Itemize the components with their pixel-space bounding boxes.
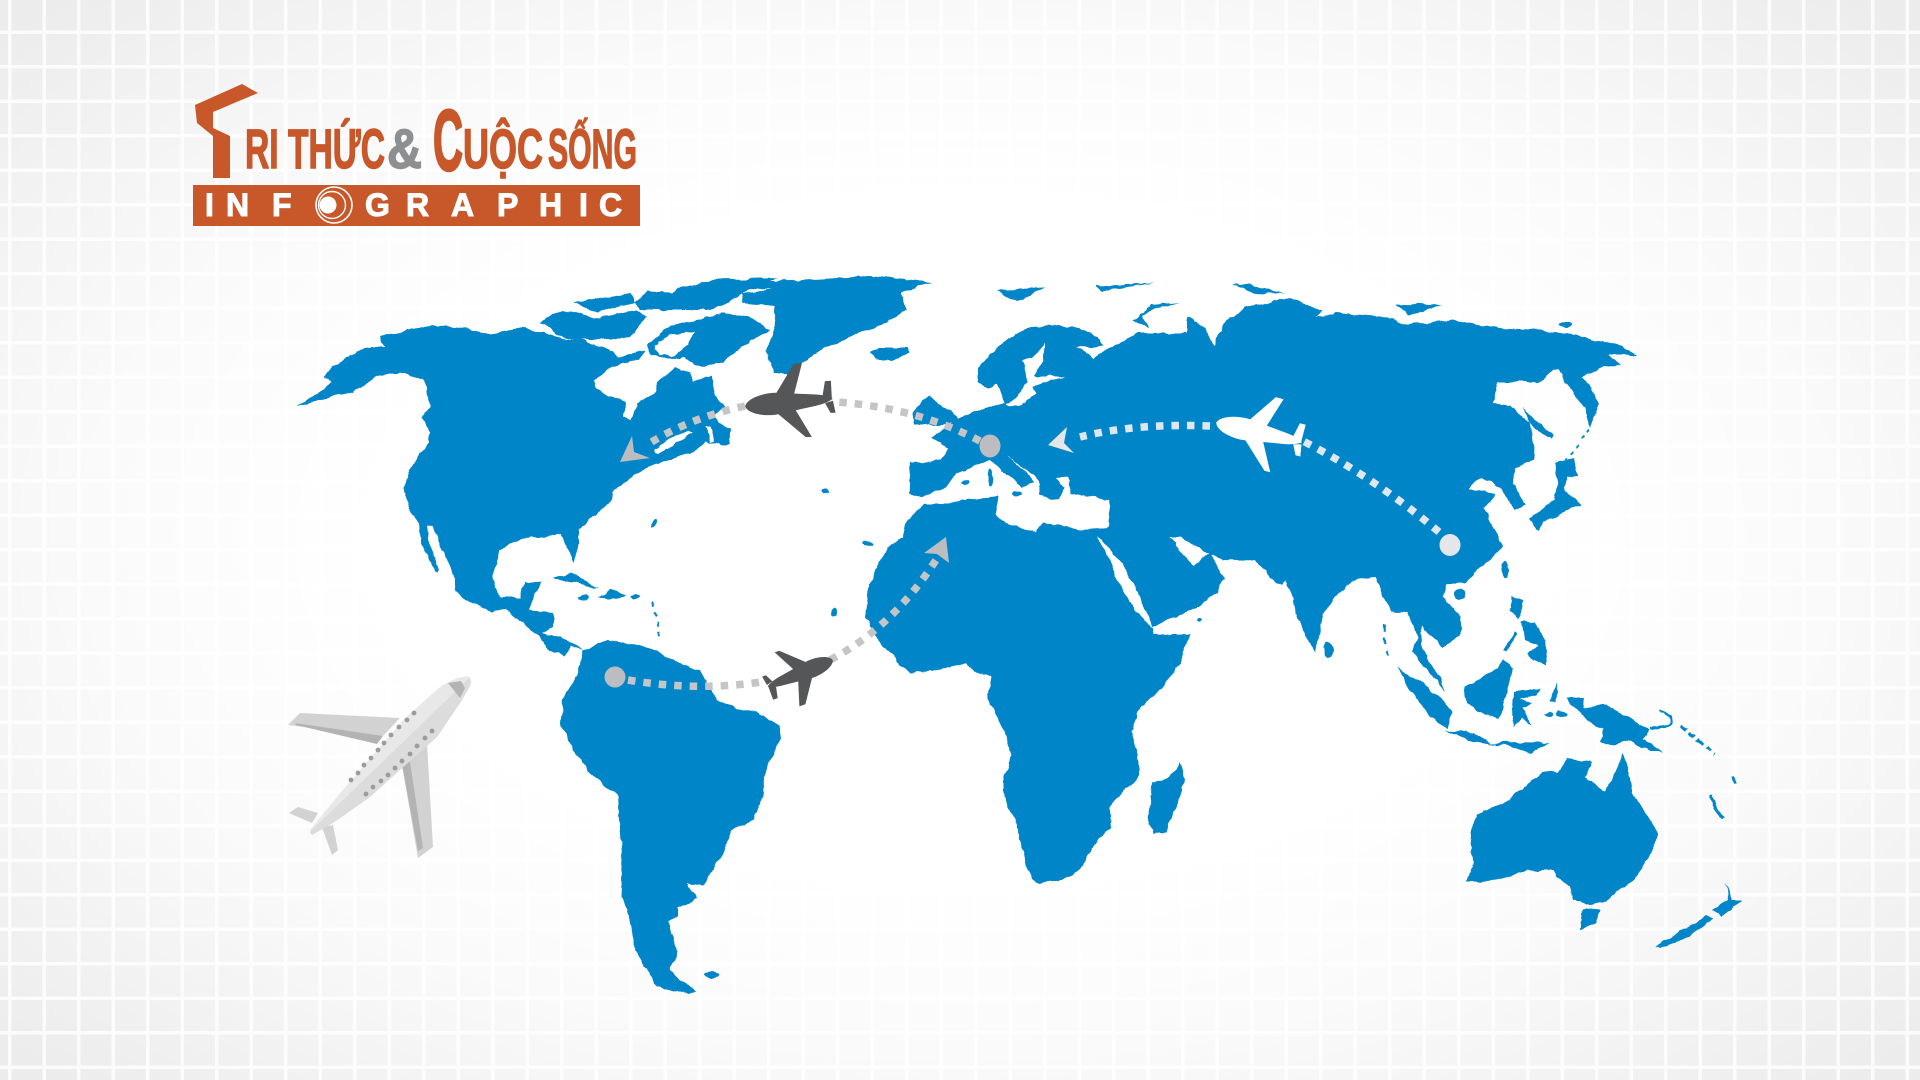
world map [296,276,1742,995]
logo: Tri thức & Cuộc sống Infographic [193,84,640,226]
cockpit [448,681,465,698]
logo wordmark: Ri Thức: RI THỨC [245,117,385,180]
logo banner text: GRAPHIC: GRAPHIC [365,187,622,223]
North America [296,325,731,657]
plane: white over Asia [1207,384,1314,479]
route segment east of plane [830,560,936,660]
Caribbean and small islands [553,283,1580,977]
route: China to Europe [1080,425,1439,532]
logo icon: house-shaped T [195,84,258,178]
route: South America to Africa [628,560,936,686]
tail fins [289,807,318,823]
route segment east of plane [1303,441,1439,532]
plane: dark over Atlantic [743,362,837,440]
Australia [1467,753,1657,905]
origin dot: Europe [980,434,1000,458]
cabin windows [349,711,434,796]
Africa [865,497,1190,884]
large grey airplane illustration [288,676,471,858]
Eurasia [909,298,1638,692]
South America [560,640,782,995]
route segment east of plane [835,402,980,441]
arrow head: toward Africa [924,537,949,563]
Southeast Asia islands and Pacific [1385,430,1742,948]
white seas and lakes [654,332,1152,628]
origin dot: China [1440,534,1460,556]
upper wing [288,713,400,737]
Arctic Canada islands [541,278,778,367]
fuselage [310,676,471,835]
logo banner text: INF: INF [205,187,292,223]
logo banner icon: rings as letter O [316,187,352,223]
Iceland [870,347,909,361]
arrow head: toward Europe [1048,427,1074,453]
logo banner [193,185,640,226]
arrow head: toward North America [620,436,650,462]
logo: Tri thức & Cuộc sống Infographic: C [433,93,463,189]
Greenland [701,276,930,373]
logo ampersand: & [387,117,422,180]
origin dot: South America [604,666,626,688]
route segment west of plane [628,680,767,686]
route segment west of plane [650,406,745,443]
logo wordmark: uộc: UỘC [463,117,543,180]
route segment west of plane [1080,425,1210,437]
lower wing [402,743,433,858]
route: Europe to North America [650,402,980,443]
Madagascar [1149,762,1185,833]
logo wordmark: sống: SỐNG [548,117,637,180]
plane: dark near Brazil [756,635,844,715]
